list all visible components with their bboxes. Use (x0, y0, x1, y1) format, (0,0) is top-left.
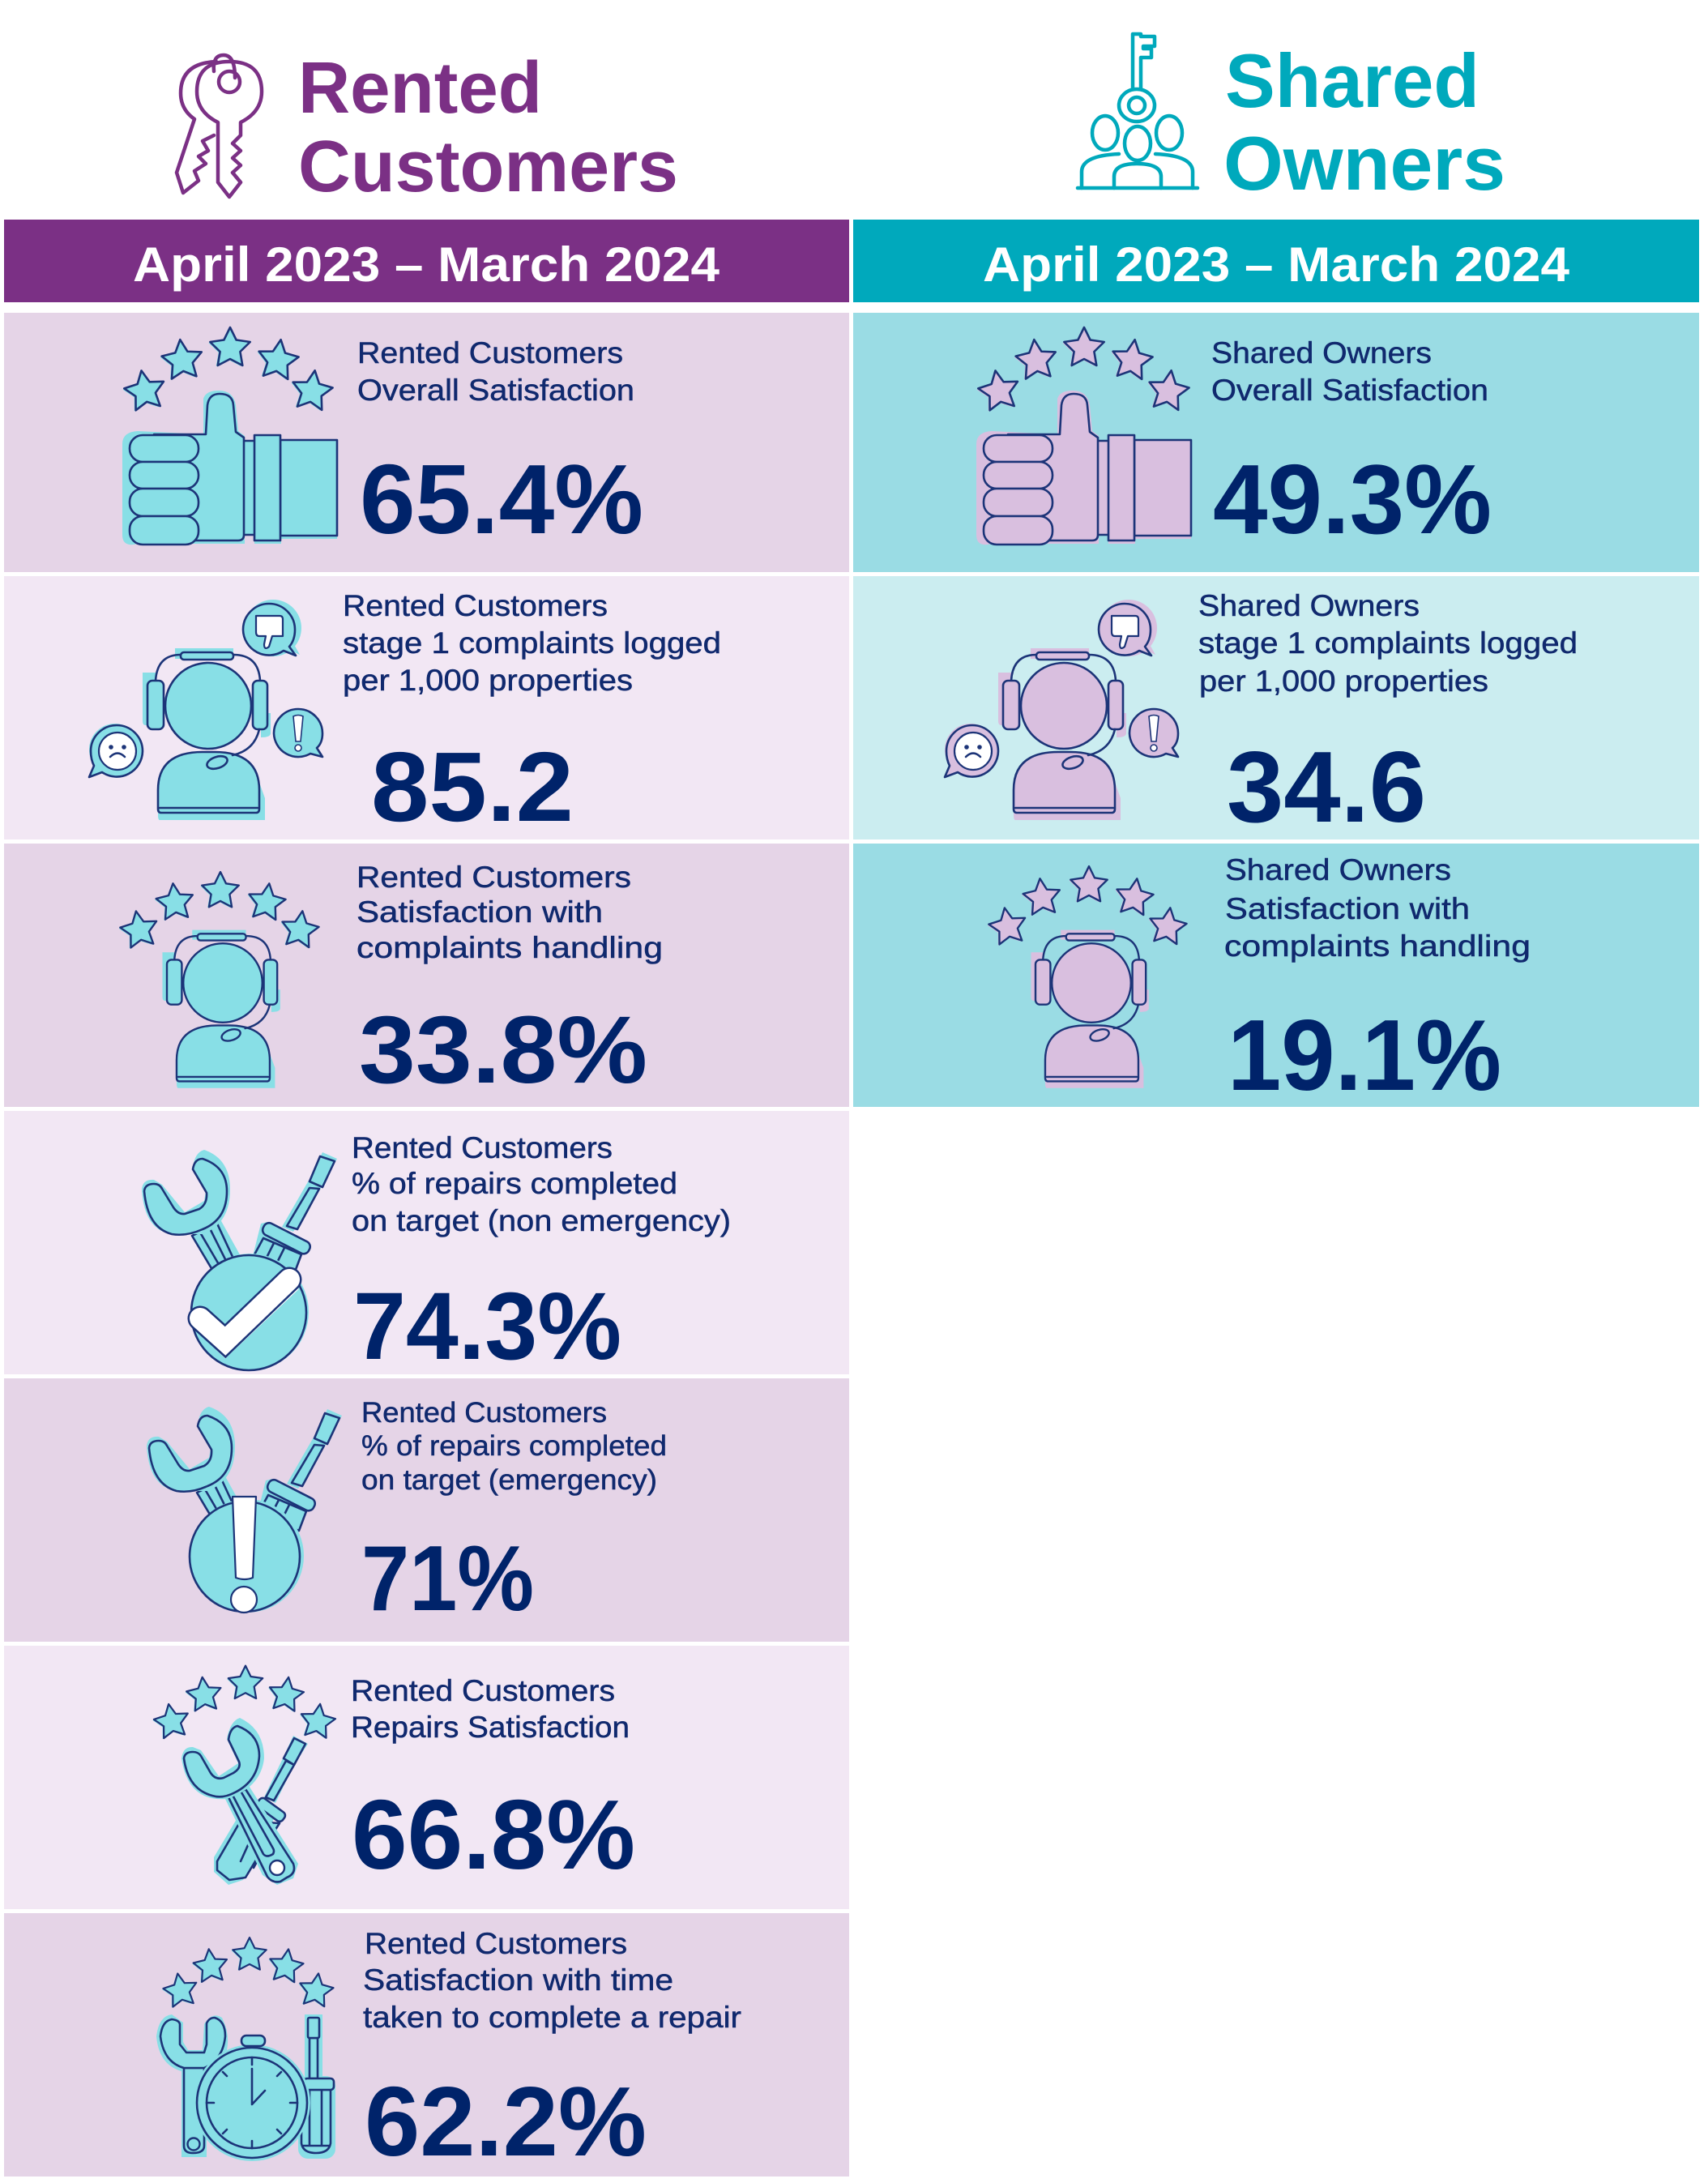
icon: headset agent with speech bubbles (89, 600, 322, 820)
label: on target (non emergency) (352, 1204, 731, 1237)
label: Rented Customers (343, 589, 608, 622)
label: Satisfaction with (1225, 892, 1470, 925)
icon: wrench, screwdriver and tick (142, 1150, 337, 1370)
label: Rented Customers (357, 861, 631, 894)
label (357, 336, 634, 407)
panel: rented overall satisfaction (4, 313, 849, 572)
label: complaints handling (1224, 929, 1531, 963)
panel: rented time taken to complete a repair (4, 1913, 849, 2177)
icon: thumbs up with five stars (120, 327, 337, 545)
value: 85.2 (371, 732, 574, 842)
title: Customers: Customers (298, 126, 678, 207)
label: per 1,000 properties (1199, 664, 1488, 698)
label: Rented Customers (361, 1397, 607, 1429)
title: Rented: Rented (298, 48, 542, 129)
label: Overall Satisfaction (1211, 374, 1488, 407)
panel: rented repairs on target emergency (4, 1378, 849, 1642)
label: Satisfaction with time (363, 1963, 673, 1997)
panel: rented repairs satisfaction (4, 1646, 849, 1909)
title: Owners: Owners (1223, 121, 1505, 206)
label (357, 861, 663, 964)
icon: headset agent with five stars (117, 872, 321, 1088)
icon: key above three people (1078, 34, 1198, 188)
label: Rented Customers (351, 1674, 615, 1707)
label: stage 1 complaints logged (343, 626, 721, 660)
value: 65.4% (360, 444, 643, 554)
label: % of repairs completed (352, 1167, 677, 1200)
label: Repairs Satisfaction (351, 1711, 630, 1744)
label (361, 1397, 667, 1496)
icon: crossed wrench and screwdriver with five stars (151, 1666, 337, 1885)
heading: shared owners (1078, 34, 1505, 206)
icon: stopwatch, wrench and screwdriver with five stars (156, 1937, 335, 2161)
label: on target (emergency) (361, 1464, 657, 1496)
icon: headset agent with speech bubbles (945, 600, 1178, 820)
label: Rented Customers (365, 1927, 627, 1960)
icon: two keys (177, 55, 262, 197)
value: 19.1% (1228, 1000, 1501, 1112)
period bar: shared owners (853, 220, 1699, 302)
panel: rented stage 1 complaints (4, 576, 849, 842)
value: 71% (361, 1527, 534, 1630)
label: per 1,000 properties (343, 664, 633, 697)
label (351, 1674, 630, 1744)
label: Overall Satisfaction (357, 374, 634, 407)
label (352, 1131, 731, 1237)
label: Shared Owners (1225, 853, 1451, 886)
title: Shared: Shared (1225, 38, 1480, 123)
period label: April 2023 – March 2024 (983, 237, 1570, 292)
value: 66.8% (352, 1779, 635, 1890)
label: % of repairs completed (361, 1430, 667, 1462)
label: taken to complete a repair (363, 2001, 741, 2034)
panel: shared stage 1 complaints (853, 576, 1699, 844)
icon: wrench, screwdriver and exclamation mark (147, 1407, 342, 1613)
label: Rented Customers (352, 1131, 613, 1164)
label (1198, 589, 1578, 698)
label: complaints handling (357, 931, 663, 964)
panel: shared complaints handling satisfaction (853, 844, 1699, 1112)
heading: rented customers (177, 48, 678, 207)
panel: rented complaints handling satisfaction (4, 844, 849, 1107)
icon: headset agent with five stars (985, 866, 1189, 1088)
value: 62.2% (365, 2066, 647, 2177)
label: Shared Owners (1211, 336, 1432, 370)
value: 49.3% (1213, 444, 1492, 554)
value: 33.8% (359, 997, 647, 1104)
value: 74.3% (353, 1273, 621, 1380)
label (1211, 336, 1488, 407)
period bar: rented customers (4, 220, 849, 302)
panel: rented repairs on target non emergency (4, 1111, 849, 1380)
label (1224, 853, 1531, 963)
icon: thumbs up with five stars (974, 327, 1191, 545)
value: 34.6 (1227, 732, 1426, 844)
label: stage 1 complaints logged (1198, 626, 1578, 660)
label (363, 1927, 741, 2034)
panel: shared overall satisfaction (853, 313, 1699, 572)
label: Shared Owners (1198, 589, 1420, 622)
label (343, 589, 721, 697)
period label: April 2023 – March 2024 (133, 237, 720, 292)
label: Satisfaction with (357, 895, 603, 929)
label: Rented Customers (357, 336, 623, 370)
